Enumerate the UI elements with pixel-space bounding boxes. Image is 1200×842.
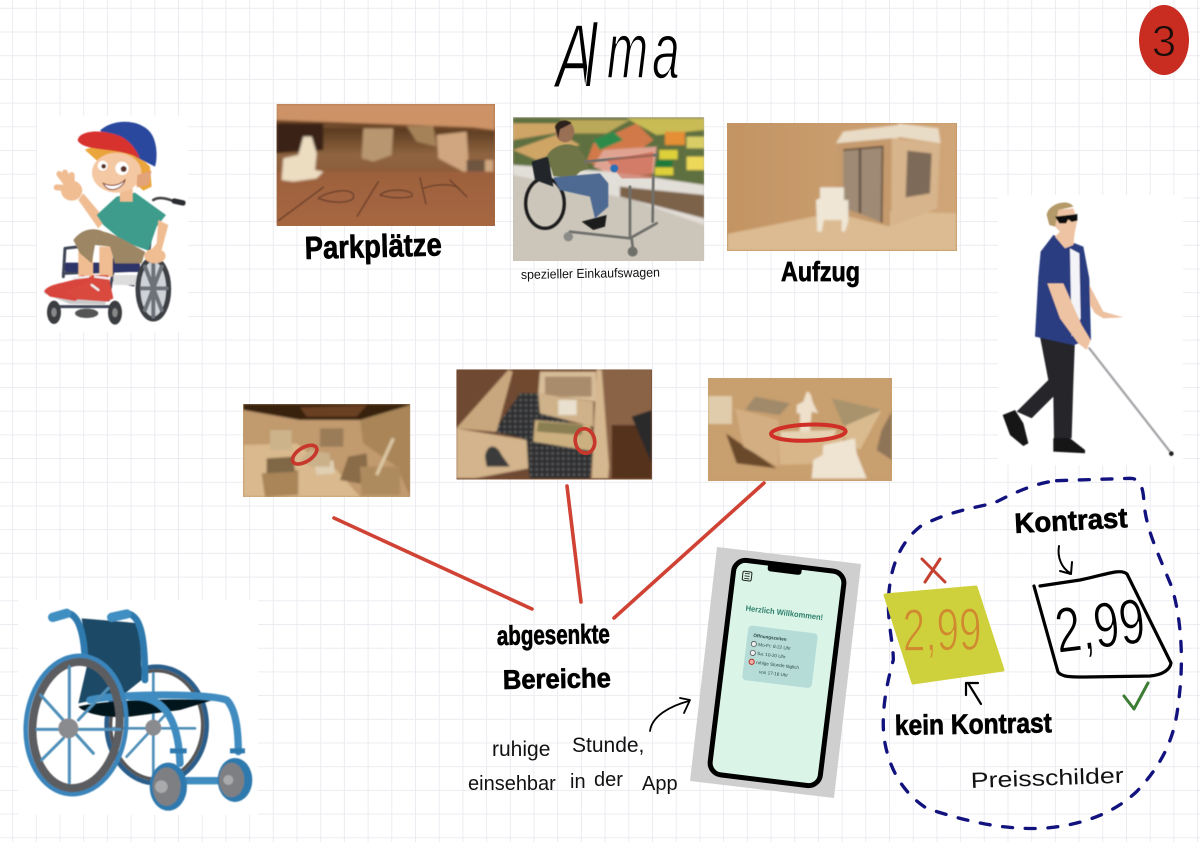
label: abgesenkte Bereiche: abgesenkte (497, 619, 610, 651)
opening hours card: Öffnungszeiten (753, 632, 787, 642)
seat and frame (78, 695, 245, 781)
opening hours card: ruhige Stunde täglich (756, 660, 800, 670)
note: ruhige Stunde: Stunde, (572, 734, 644, 757)
wheelchair user (526, 120, 657, 257)
note: ruhige Stunde: der (594, 769, 628, 791)
photo: Aufzug model (727, 123, 957, 251)
arrow to low contrast tag (966, 683, 981, 704)
front wheel (19, 651, 133, 799)
photo: lowered area in shelves (243, 404, 410, 497)
casters (150, 758, 252, 811)
label: abgesenkte Bereiche (497, 619, 611, 695)
badge: page number 3: 3 (1152, 17, 1176, 66)
icon: green check (1124, 683, 1148, 709)
price tag: high contrast (1034, 572, 1171, 677)
price tag: low contrast: 2,99 (902, 596, 982, 664)
label: Kontrast: Kontrast (1014, 502, 1128, 539)
photo: wheelchair user with special shopping cart (513, 117, 704, 261)
photo: Parkplätze model (276, 104, 495, 226)
arrow to high contrast tag (1059, 546, 1072, 574)
opening hours card (742, 625, 818, 688)
torso and arms (1035, 235, 1123, 350)
trousers and shoes (1003, 337, 1085, 453)
head with sunglasses (1047, 203, 1077, 248)
back wheel (107, 667, 207, 783)
opening hours card: Mo-Fr: 8-22 Uhr (758, 642, 792, 651)
backrest and handles (53, 613, 145, 703)
phone mockup (690, 547, 861, 798)
photo: lowered area with dotted floor (456, 369, 652, 480)
note: ruhige Stunde: ruhige (492, 738, 556, 761)
title: l (585, 5, 599, 106)
arms, legs and shirt (44, 173, 168, 305)
price tag: low contrast (885, 587, 1003, 683)
label: Parkplätze: Parkplätze (304, 226, 442, 266)
label: kein Kontrast: kein Kontrast (895, 707, 1052, 741)
phone screen (709, 559, 845, 787)
welcome heading: Herzlich Willkommen! (745, 604, 824, 622)
photo: lowered counter (708, 378, 892, 481)
badge: page number 3 (1139, 5, 1189, 75)
price tag: high contrast: 2,99 (1051, 584, 1149, 667)
note: ruhige Stunde: in (570, 771, 591, 793)
arrow to phone (650, 698, 690, 731)
title (553, 5, 680, 106)
opening hours card: Sa: 10-20 Uhr (757, 651, 786, 659)
illustration: boy in wheelchair (37, 116, 188, 332)
note: ruhige Stunde: einsehbar (468, 773, 561, 795)
phone notch (767, 563, 802, 575)
opening hours card: von 17-18 Uhr (759, 669, 789, 678)
head and cap (78, 122, 157, 202)
label: spezieller Einkaufswagen: spezieller Einkaufswagen (521, 265, 660, 282)
title: m (607, 7, 648, 96)
title: a (652, 7, 680, 96)
white cane (1089, 348, 1174, 456)
label: Aufzug: Aufzug (781, 256, 860, 287)
panel: Preisschilder dashed outline (883, 478, 1181, 829)
title: A (553, 5, 593, 106)
label: abgesenkte Bereiche: Bereiche (503, 663, 611, 695)
illustration: blind man with white cane (998, 195, 1183, 465)
note: ruhige Stunde: App (642, 773, 678, 795)
icon: red cross (922, 559, 945, 582)
menu icon (742, 571, 752, 581)
illustration: wheelchair (18, 600, 258, 815)
note: ruhige Stunde (468, 734, 678, 795)
connector lines to abgesenkte Bereiche (334, 483, 764, 618)
label: Preisschilder: Preisschilder (970, 763, 1124, 793)
wheelchair frame of boy (47, 198, 186, 325)
